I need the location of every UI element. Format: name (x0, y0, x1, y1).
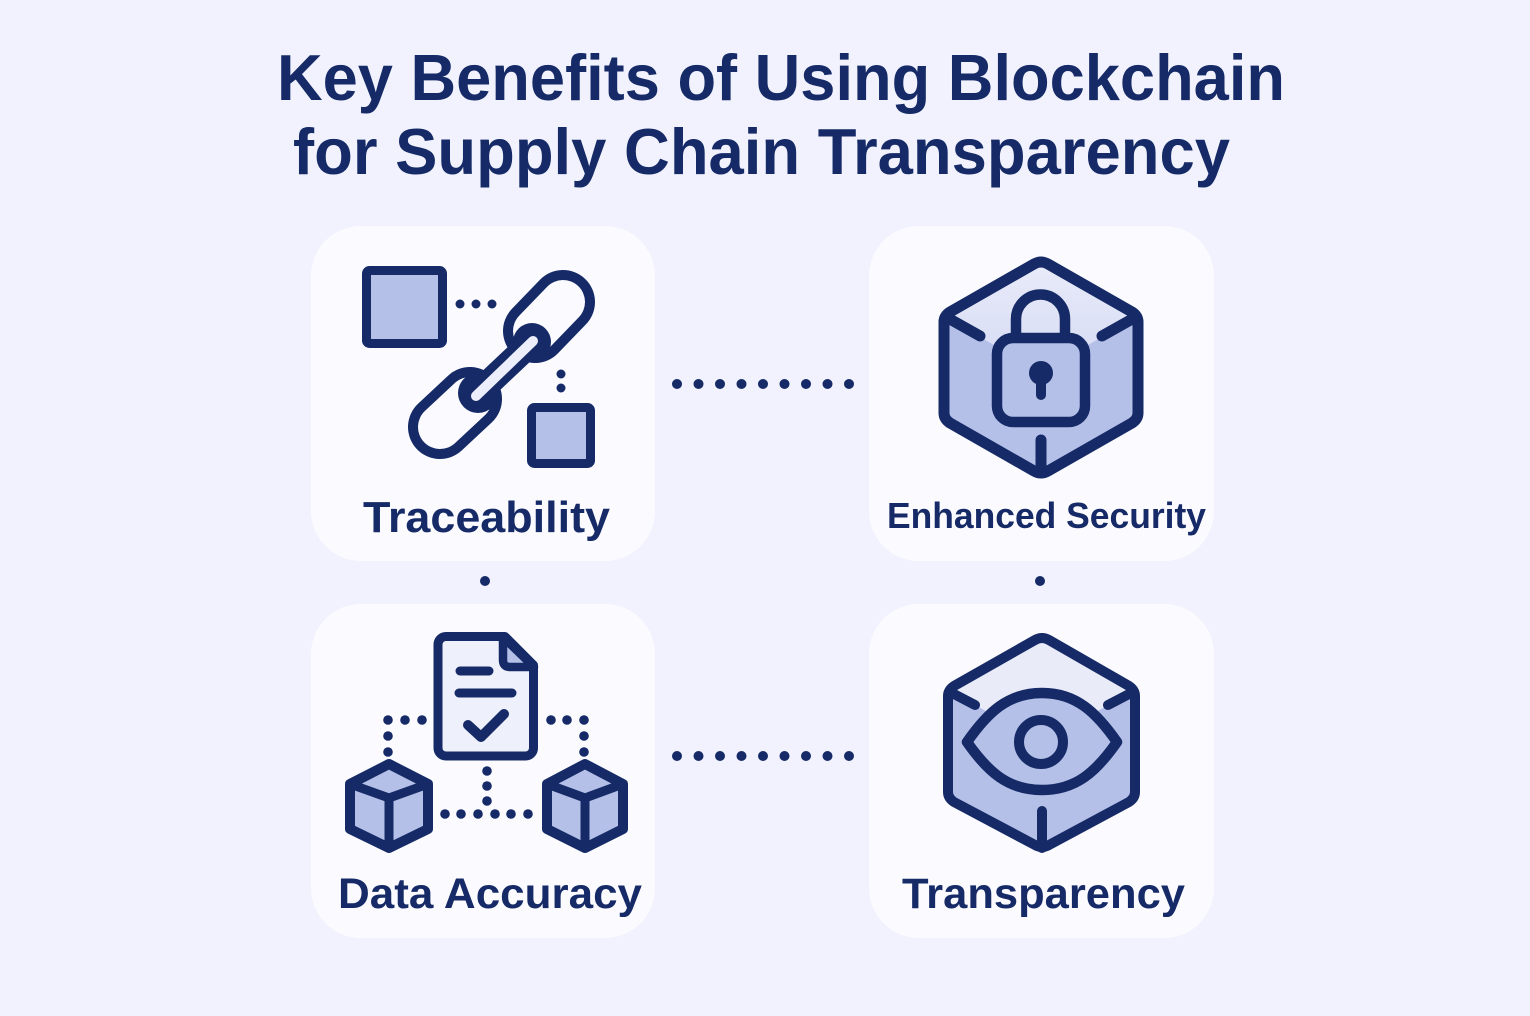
icon: chain link with blocks (366, 270, 590, 464)
connector: traceability to data accuracy (480, 576, 490, 586)
label: traceability: Traceability (363, 493, 611, 542)
connector: data accuracy to transparency (672, 751, 854, 761)
title (277, 41, 1285, 188)
icon: hexagonal block with eye (948, 637, 1135, 849)
label: transparency: Transparency (902, 870, 1185, 918)
title: Key Benefits of Using Blockchain (277, 41, 1285, 114)
connector: enhanced security to transparency (1035, 576, 1045, 586)
icon: document with check and linked blocks (350, 636, 623, 848)
label: enhanced security: Enhanced Security (887, 495, 1206, 536)
panel: enhanced security (869, 226, 1214, 561)
icon: hexagonal block with padlock (944, 261, 1138, 475)
label: data accuracy: Data Accuracy (338, 870, 642, 918)
title: for Supply Chain Transparency (293, 115, 1230, 188)
panel: data accuracy (311, 604, 655, 938)
connector: traceability to enhanced security (672, 379, 854, 389)
panel: traceability (311, 226, 655, 561)
panel: transparency (869, 604, 1214, 938)
